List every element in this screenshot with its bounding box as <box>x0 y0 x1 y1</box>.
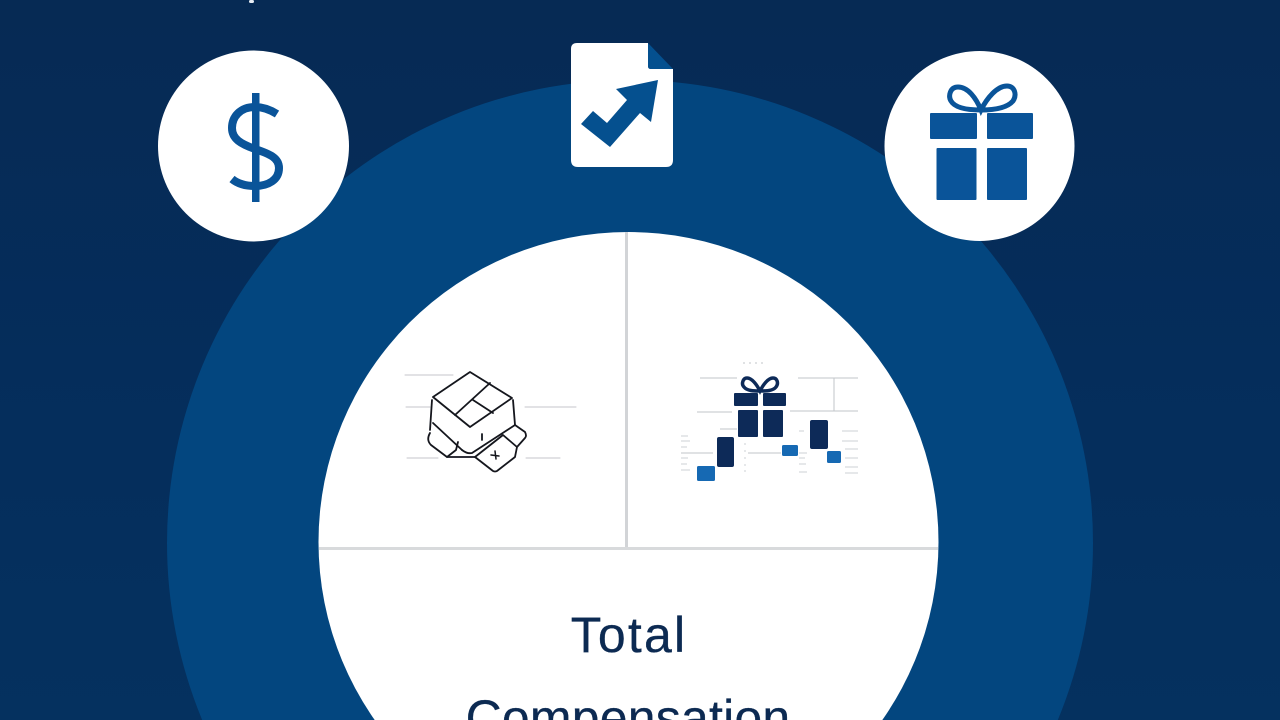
icon: gift badge <box>884 51 1074 241</box>
leader lines <box>681 363 858 453</box>
title: Total Compensation: Total <box>571 607 687 663</box>
heading remnant cropped at top edge <box>249 0 254 3</box>
gift <box>734 393 786 437</box>
blue blocks <box>697 466 715 481</box>
leader lines <box>405 375 576 458</box>
navy bars <box>717 437 734 467</box>
icon: package outline <box>405 372 576 472</box>
icon: document with rising arrow <box>571 43 673 167</box>
icon: navy gift with bars chart <box>681 363 858 481</box>
icon: dollar badge <box>158 50 349 242</box>
outer blue ring <box>167 80 1093 720</box>
central white circle <box>318 232 938 720</box>
